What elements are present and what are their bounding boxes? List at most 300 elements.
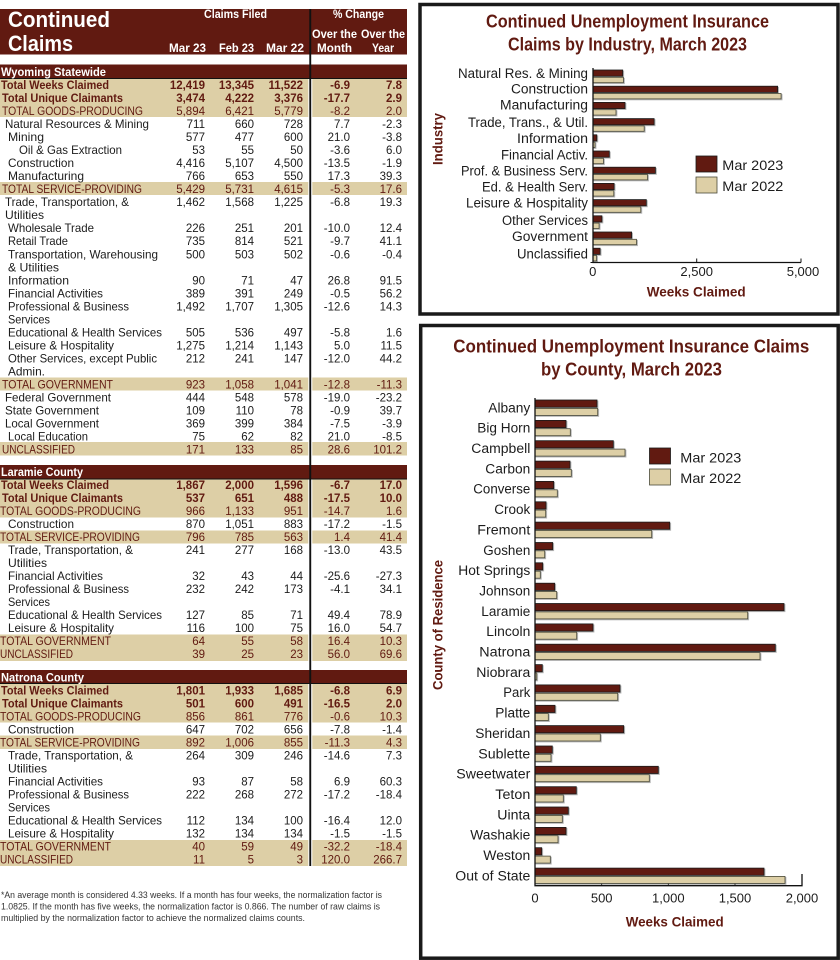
category labels: county: Weston <box>483 848 530 863</box>
section: Natrona County: Total Weeks Claimed <box>1 683 109 697</box>
section: Wyoming Statewide: 56.2 <box>380 288 402 300</box>
chart title: industry: Claims by Industry, March 2023 <box>508 35 747 55</box>
category labels: county: Niobrara <box>476 665 531 680</box>
category labels: industry: Other Services <box>502 213 588 228</box>
section: Laramie County: -14.7 <box>324 506 350 518</box>
section: Wyoming Statewide: 735 <box>186 236 205 248</box>
section: Natrona County: 600 <box>235 698 254 710</box>
section: Wyoming Statewide: 5,731 <box>225 184 254 196</box>
tick labels: county: 1,000 <box>652 891 685 906</box>
table header: Over the <box>312 27 357 41</box>
section: Wyoming Statewide: Wholesale Trade <box>8 221 94 235</box>
section: Natrona County: 132 <box>186 828 205 840</box>
section: Wyoming Statewide: Trade, Transportation, & <box>5 195 129 209</box>
section: Wyoming Statewide: -2.3 <box>382 119 402 131</box>
section: Wyoming Statewide: -7.5 <box>330 418 350 430</box>
section: Laramie County: Educational & Health Services <box>8 608 162 622</box>
category labels: county: Albany <box>488 400 531 415</box>
axes: industry <box>590 68 801 262</box>
section: Natrona County: 266.7 <box>373 855 402 867</box>
table header: Feb 23 <box>219 41 254 55</box>
section: Laramie County: 71 <box>290 610 303 622</box>
section: Natrona County: -16.4 <box>324 816 351 828</box>
section: Laramie County: Total Unique Claimants <box>2 491 123 505</box>
section: Natrona County: 2.0 <box>386 698 402 710</box>
section: Wyoming Statewide: 5,107 <box>225 158 254 170</box>
panel: claims table <box>0 7 407 924</box>
section: Wyoming Statewide: 521 <box>284 236 303 248</box>
section: Laramie County: 25 <box>241 649 254 661</box>
section: Wyoming Statewide: 5,429 <box>176 184 205 196</box>
section: Laramie County: Total Weeks Claimed <box>1 478 109 492</box>
section: Wyoming Statewide: Other Services, except Public <box>8 351 157 365</box>
section: Laramie County: 16.0 <box>328 623 350 635</box>
section: Wyoming Statewide: 82 <box>290 432 303 444</box>
section: Natrona County: 6.9 <box>334 776 350 788</box>
section: Laramie County: 241 <box>186 545 205 557</box>
table header: Claims Filed <box>204 7 267 21</box>
section: Wyoming Statewide: TOTAL GOODS-PRODUCING <box>2 104 143 118</box>
section: Wyoming Statewide: 660 <box>235 119 254 131</box>
section: Wyoming Statewide: -3.8 <box>382 132 402 144</box>
section: Natrona County: TOTAL GOODS-PRODUCING <box>0 709 141 723</box>
section: Laramie County: 277 <box>235 545 254 557</box>
category labels: industry: Natural Res. & Mining <box>458 66 588 81</box>
section: Laramie County: Professional & Business <box>8 582 129 596</box>
section: Wyoming Statewide: 39.3 <box>380 171 402 183</box>
section: Laramie County: TOTAL GOODS-PRODUCING <box>0 504 141 518</box>
section: Wyoming Statewide: 241 <box>235 353 254 365</box>
section: Wyoming Statewide: -8.5 <box>382 432 402 444</box>
section: Wyoming Statewide: 2.9 <box>386 93 402 105</box>
section: Natrona County: 264 <box>186 750 206 762</box>
section: Laramie County: 1,596 <box>274 480 303 492</box>
section: Laramie County: 10.0 <box>380 493 402 505</box>
category labels: industry: Leisure & Hospitality <box>466 195 588 210</box>
category labels: county: Out of State <box>455 868 530 883</box>
section: Natrona County: 100 <box>284 816 303 828</box>
section: Laramie County: 1.6 <box>386 506 402 518</box>
section: Wyoming Statewide: 1,275 <box>176 340 205 352</box>
section: Natrona County: Professional & Business <box>8 788 129 802</box>
legend: industry <box>696 156 784 194</box>
section: Laramie County: 1.4 <box>334 532 351 544</box>
section: Natrona County: -18.4 <box>376 842 403 854</box>
section: Wyoming Statewide: -11.3 <box>377 380 402 392</box>
tick labels: county: 500 <box>591 891 613 906</box>
section: Laramie County: 55 <box>241 636 254 648</box>
section: Wyoming Statewide: Natural Resources & Mining <box>5 117 149 131</box>
category labels: industry <box>458 66 588 261</box>
section: Wyoming Statewide: -3.6 <box>330 145 350 157</box>
section: Natrona County: 1,933 <box>225 685 254 697</box>
section: Wyoming Statewide: 444 <box>186 392 206 404</box>
category labels: county: Natrona <box>479 644 531 660</box>
section: Natrona County: -1.5 <box>330 828 350 840</box>
section: Natrona County: 491 <box>284 698 304 710</box>
section: Wyoming Statewide: Total Weeks Claimed <box>1 78 109 92</box>
chart title: county: Continued Unemployment Insurance Claims <box>453 336 809 356</box>
section: Laramie County: 796 <box>186 532 205 544</box>
section: Wyoming Statewide: 26.8 <box>328 275 350 287</box>
section: Natrona County: -32.2 <box>324 842 350 854</box>
tick labels: county: 0 <box>531 891 539 906</box>
legend: industry: Mar 2022 <box>722 178 784 194</box>
section: Laramie County: 951 <box>284 506 303 518</box>
category labels: county: Sheridan <box>475 726 530 741</box>
section: Wyoming Statewide: 7.7 <box>334 119 350 131</box>
section: Natrona County: Educational & Health Services <box>8 814 162 828</box>
section: Laramie County: -6.7 <box>330 480 350 492</box>
section: Wyoming Statewide: 5,894 <box>176 106 206 118</box>
section: Laramie County: 54.7 <box>380 623 402 635</box>
section: Wyoming Statewide: -0.9 <box>330 406 350 418</box>
category labels: county: Goshen <box>483 543 530 558</box>
section: Laramie County: Laramie County <box>1 465 83 479</box>
section: Natrona County: 10.3 <box>380 711 402 723</box>
axis title: Weeks Claimed: Weeks Claimed <box>626 914 724 930</box>
chart title: county: by County, March 2023 <box>541 360 722 380</box>
section: Wyoming Statewide: 6.0 <box>386 145 402 157</box>
section: Laramie County: 116 <box>187 623 205 635</box>
section: Wyoming Statewide: 91.5 <box>380 275 402 287</box>
section: Natrona County: -14.6 <box>324 750 350 762</box>
category labels: industry: Unclassified <box>517 246 588 261</box>
axes: county <box>535 398 802 886</box>
section: Wyoming Statewide: 384 <box>284 418 304 430</box>
section: Natrona County: -0.6 <box>330 711 350 723</box>
category labels: county: Fremont <box>477 522 531 537</box>
section: Wyoming Statewide: 55 <box>241 145 254 157</box>
section: Natrona County: 3 <box>297 855 303 867</box>
tick labels: county <box>531 891 818 906</box>
section: Wyoming Statewide: 766 <box>186 171 205 183</box>
legend: industry: Mar 2023 <box>722 157 784 173</box>
section: Wyoming Statewide: 249 <box>284 288 303 300</box>
section: Wyoming Statewide: 4,615 <box>274 184 303 196</box>
section: Wyoming Statewide: 21.0 <box>328 132 350 144</box>
section: Wyoming Statewide: 711 <box>187 119 205 131</box>
section: Wyoming Statewide: 71 <box>241 275 254 287</box>
section: Natrona County: 112 <box>187 816 205 828</box>
section: Laramie County: 17.0 <box>380 480 402 492</box>
section: Wyoming Statewide: 477 <box>235 132 254 144</box>
section: Wyoming Statewide: 44.2 <box>380 353 402 365</box>
section: Wyoming Statewide: 13,345 <box>219 80 255 92</box>
section: Wyoming Statewide: 212 <box>186 353 205 365</box>
section: Wyoming Statewide: 1,143 <box>274 340 303 352</box>
section: Wyoming Statewide: 600 <box>284 132 303 144</box>
section: Wyoming Statewide: 653 <box>235 171 254 183</box>
section: Laramie County: 173 <box>284 584 303 596</box>
section: Laramie County: 43 <box>241 571 254 583</box>
section: Laramie County: 16.4 <box>328 636 351 648</box>
section: Laramie County: 563 <box>284 532 303 544</box>
section: Wyoming Statewide: 5.0 <box>334 340 350 352</box>
bar chart: county <box>535 400 785 883</box>
table header: Mar 23 <box>169 41 206 55</box>
section: Laramie County: 537 <box>186 493 205 505</box>
category labels: county: Campbell <box>471 441 530 456</box>
section: Wyoming Statewide: Wyoming Statewide <box>1 65 106 79</box>
section: Wyoming Statewide: Financial Activities <box>8 286 103 300</box>
section: Natrona County: Trade, Transportation, & <box>8 748 133 762</box>
section: Laramie County: 56.0 <box>328 649 350 661</box>
section: Wyoming Statewide: Professional & Business <box>8 299 129 313</box>
section: Wyoming Statewide: 1,707 <box>225 301 254 313</box>
section: Laramie County: 64 <box>192 636 206 648</box>
category labels: industry: Financial Activ. <box>501 147 588 162</box>
tick labels: industry: 0 <box>589 264 596 279</box>
category labels: county: Lincoln <box>486 624 530 639</box>
section: Wyoming Statewide: -0.6 <box>330 249 350 261</box>
axis title: Industry: Industry <box>430 113 446 165</box>
section: Natrona County: 7.3 <box>386 750 402 762</box>
section: Laramie County: 43.5 <box>380 545 402 557</box>
section: Natrona County: 12.0 <box>380 816 402 828</box>
bar chart: industry <box>593 70 781 261</box>
section: Wyoming Statewide: -0.5 <box>330 288 350 300</box>
section: Wyoming Statewide: 389 <box>186 288 205 300</box>
section: Wyoming Statewide: -6.9 <box>330 80 350 92</box>
section: Laramie County: -27.3 <box>376 571 402 583</box>
table header: Year <box>372 41 394 55</box>
section: Wyoming Statewide: 3,474 <box>176 93 206 105</box>
category labels: county: Sublette <box>478 746 530 761</box>
section: Laramie County: 883 <box>284 519 303 531</box>
section: Laramie County: 168 <box>284 545 303 557</box>
section: Natrona County: 1,801 <box>176 685 206 697</box>
section: Laramie County: -1.5 <box>382 519 402 531</box>
legend: county <box>650 448 742 486</box>
section: Wyoming Statewide: -5.3 <box>330 184 350 196</box>
category labels: industry: Prof. & Business Serv. <box>461 163 588 178</box>
section: Wyoming Statewide: 39.7 <box>380 406 402 418</box>
section: Laramie County: Construction <box>8 517 74 531</box>
section: Wyoming Statewide: Local Education <box>8 430 88 444</box>
section: Laramie County: 49.4 <box>328 610 351 622</box>
section: Wyoming Statewide: 548 <box>235 392 254 404</box>
section: Natrona County: Construction <box>8 722 74 736</box>
section: Wyoming Statewide <box>0 64 407 457</box>
section: Wyoming Statewide: -9.7 <box>330 236 350 248</box>
section: Natrona County: 702 <box>235 724 254 736</box>
section: Laramie County: 23 <box>290 649 303 661</box>
section: Natrona County: Leisure & Hospitality <box>8 826 114 840</box>
section: Wyoming Statewide: 1,462 <box>176 197 205 209</box>
section: Wyoming Statewide: 502 <box>284 249 303 261</box>
section: Wyoming Statewide: 21.0 <box>328 432 350 444</box>
section: Natrona County: Utilities <box>8 761 47 775</box>
section: Natrona County: Natrona County <box>1 670 84 684</box>
section: Wyoming Statewide: & Utilities <box>8 260 59 274</box>
section: Natrona County: 856 <box>186 711 205 723</box>
section: Natrona County: 501 <box>186 698 206 710</box>
section: Laramie County: 58 <box>290 636 303 648</box>
section: Wyoming Statewide: -6.8 <box>330 197 350 209</box>
chart title: industry <box>486 12 769 55</box>
section: Natrona County: 222 <box>186 790 205 802</box>
section: Laramie County: -17.5 <box>324 493 351 505</box>
tick labels: county: 2,000 <box>786 891 818 906</box>
section: Laramie County: 242 <box>235 584 254 596</box>
section: Wyoming Statewide: 147 <box>284 353 303 365</box>
category labels: county: Uinta <box>497 807 531 822</box>
tick labels: industry <box>589 264 819 279</box>
section: Wyoming Statewide: Construction <box>8 156 74 170</box>
section: Wyoming Statewide: Services <box>8 312 50 326</box>
section: Wyoming Statewide: Utilities <box>5 208 44 222</box>
section: Wyoming Statewide: 133 <box>235 445 254 457</box>
section: Wyoming Statewide: 4,222 <box>225 93 254 105</box>
section: Wyoming Statewide: 226 <box>186 223 205 235</box>
section: Wyoming Statewide: Admin. <box>8 364 45 378</box>
section: Wyoming Statewide: Oil & Gas Extraction <box>19 143 122 157</box>
section: Wyoming Statewide: 90 <box>192 275 205 287</box>
section: Wyoming Statewide: 536 <box>235 327 254 339</box>
section: Wyoming Statewide: 369 <box>186 418 205 430</box>
section: Wyoming Statewide: Mining <box>8 130 44 144</box>
axis title: County of Residence: County of Residence <box>429 560 445 690</box>
section: Wyoming Statewide: 497 <box>284 327 303 339</box>
section: Laramie County: 488 <box>284 493 304 505</box>
section: Natrona County: 268 <box>235 790 254 802</box>
category labels: industry: Information <box>517 131 588 146</box>
section: Wyoming Statewide: -12.8 <box>324 380 350 392</box>
section: Wyoming Statewide: -12.6 <box>324 301 350 313</box>
section: Natrona County: 60.3 <box>380 776 402 788</box>
section: Wyoming Statewide: 814 <box>235 236 255 248</box>
section: Natrona County: 1,685 <box>274 685 304 697</box>
section: Laramie County: 32 <box>192 571 205 583</box>
section: Wyoming Statewide: State Government <box>5 404 100 418</box>
section: Natrona County: Services <box>8 800 50 814</box>
section: Wyoming Statewide: 503 <box>235 249 254 261</box>
section: Natrona County: 134 <box>235 828 255 840</box>
section: Wyoming Statewide: 578 <box>284 392 303 404</box>
section: Wyoming Statewide: 14.3 <box>380 301 402 313</box>
section: Wyoming Statewide: TOTAL GOVERNMENT <box>2 378 114 392</box>
section: Natrona County: 776 <box>284 711 303 723</box>
section: Natrona County: 1,006 <box>225 737 254 749</box>
section: Natrona County: 49 <box>290 842 303 854</box>
section: Wyoming Statewide: 500 <box>186 249 205 261</box>
section: Wyoming Statewide: Retail Trade <box>8 234 68 248</box>
category labels: county: Big Horn <box>477 421 530 436</box>
section: Natrona County: -1.4 <box>382 724 403 736</box>
section: Wyoming Statewide: -1.9 <box>382 158 402 170</box>
section: Laramie County: 785 <box>235 532 254 544</box>
section: Laramie County: 870 <box>186 519 205 531</box>
section: Laramie County: 232 <box>186 584 205 596</box>
section: Wyoming Statewide: 12,419 <box>170 80 205 92</box>
tick labels: industry: 5,000 <box>787 264 819 279</box>
section: Wyoming Statewide: 4,416 <box>176 158 205 170</box>
footnote: multiplied by the normalization factor to achieve the normalized claims counts. <box>1 913 305 924</box>
category labels: county: Johnson <box>479 584 530 598</box>
table header: Over the <box>361 27 405 41</box>
section: Natrona County: 59 <box>241 842 254 854</box>
section: Natrona County: -6.8 <box>330 685 351 697</box>
section: Natrona County: 855 <box>284 737 303 749</box>
section: Wyoming Statewide: Federal Government <box>5 390 112 404</box>
section: Natrona County: 309 <box>235 750 254 762</box>
section: Wyoming Statewide: -3.9 <box>382 418 402 430</box>
section: Natrona County: 134 <box>284 828 304 840</box>
section: Wyoming Statewide: 399 <box>235 418 254 430</box>
section: Wyoming Statewide: 5,779 <box>274 106 303 118</box>
table header: Continued <box>8 7 110 32</box>
section: Laramie County: -4.1 <box>330 584 350 596</box>
table header: Mar 22 <box>266 41 304 55</box>
section: Laramie County: -17.2 <box>324 519 350 531</box>
section: Natrona County: Total Unique Claimants <box>2 696 123 710</box>
section: Laramie County: -25.6 <box>324 571 350 583</box>
section: Wyoming Statewide: 53 <box>192 145 205 157</box>
section: Wyoming Statewide: 109 <box>186 406 205 418</box>
section: Natrona County: 656 <box>284 724 303 736</box>
section: Laramie County: 75 <box>290 623 303 635</box>
section: Wyoming Statewide: Educational & Health Services <box>8 325 162 339</box>
section: Wyoming Statewide: -12.0 <box>324 353 350 365</box>
section: Natrona County: 892 <box>186 737 205 749</box>
section: Wyoming Statewide: Local Government <box>5 416 100 430</box>
chart title: county <box>453 336 809 380</box>
section: Natrona County: TOTAL SERVICE-PROVIDING <box>0 735 140 749</box>
tick labels: industry: 2,500 <box>680 264 713 279</box>
section: Wyoming Statewide: 41.1 <box>380 236 402 248</box>
section: Laramie County: Services <box>8 595 50 609</box>
category labels: county: Converse <box>473 482 530 497</box>
section: Laramie County: 10.3 <box>380 636 402 648</box>
category labels: county: Sweetwater <box>456 767 531 782</box>
section: Natrona County: 647 <box>186 724 205 736</box>
section: Natrona County: -1.5 <box>382 828 402 840</box>
section: Laramie County: 39 <box>192 649 205 661</box>
section: Wyoming Statewide: 28.6 <box>328 445 350 457</box>
section: Wyoming Statewide: 728 <box>284 119 303 131</box>
section: Wyoming Statewide: UNCLASSIFIED <box>2 443 75 457</box>
category labels: industry: Construction <box>511 82 588 97</box>
section: Wyoming Statewide: 2.0 <box>386 106 402 118</box>
footnote <box>1 890 382 924</box>
section: Wyoming Statewide: -19.0 <box>324 392 350 404</box>
section: Wyoming Statewide: -5.8 <box>330 327 350 339</box>
table header: % Change <box>333 7 384 21</box>
section: Wyoming Statewide: 550 <box>284 171 303 183</box>
section: Wyoming Statewide: 1,305 <box>274 301 303 313</box>
section: Wyoming Statewide: -13.5 <box>324 158 350 170</box>
section: Natrona County: 4.3 <box>386 737 402 749</box>
section: Natrona County: Financial Activities <box>8 774 103 788</box>
section: Wyoming Statewide: 1.6 <box>386 327 402 339</box>
section: Natrona County: 246 <box>284 750 303 762</box>
section: Wyoming Statewide: 50 <box>290 145 303 157</box>
section: Natrona County: 11 <box>193 855 205 867</box>
section: Wyoming Statewide: 110 <box>236 406 254 418</box>
category labels: industry: Manufacturing <box>500 98 588 113</box>
section: Wyoming Statewide: 62 <box>241 432 254 444</box>
section: Natrona County: -7.8 <box>330 724 350 736</box>
section: Wyoming Statewide: 201 <box>284 223 303 235</box>
section: Natrona County <box>0 670 407 867</box>
table header <box>0 7 407 56</box>
section: Wyoming Statewide: 47 <box>290 275 303 287</box>
section: Natrona County: UNCLASSIFIED <box>0 853 73 867</box>
section: Laramie County: -13.0 <box>324 545 350 557</box>
section: Wyoming Statewide: 505 <box>186 327 205 339</box>
section: Wyoming Statewide: -8.2 <box>330 106 350 118</box>
